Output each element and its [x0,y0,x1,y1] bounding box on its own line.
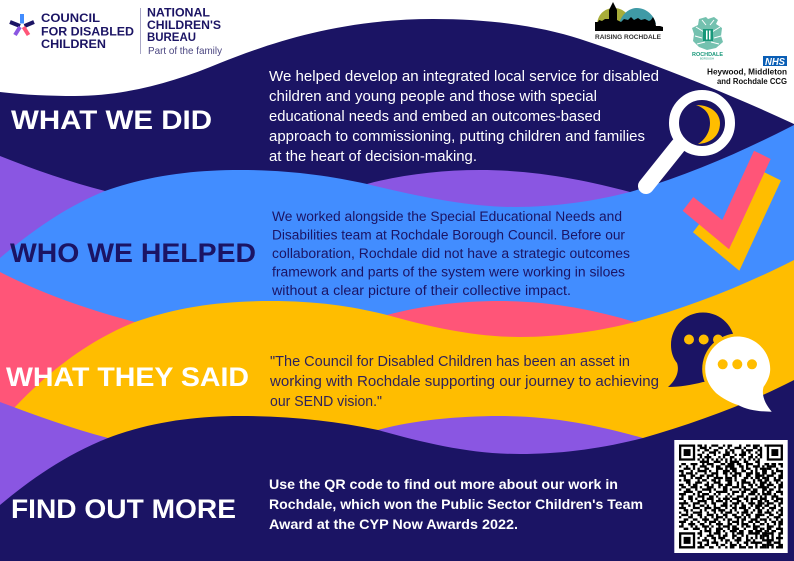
logo: Raising Rochdale: RAISING ROCHDALE [595,34,662,41]
wave: purple accent upper [0,156,630,300]
heading: what we did: WHAT WE DID [11,105,212,135]
logo: National Children's Bureau: BUREAU [147,31,196,44]
wave: yellow what they said band [0,260,794,470]
icon: magnifying glass [646,95,730,186]
text block: quote: working with Rochdale supporting our journey to achieving [269,374,659,390]
wave: navy find out more band [0,380,794,561]
text block: what we did: educational needs and embed an outcomes-based [269,109,601,125]
text block: what we did: children and young people and those with special [269,89,597,105]
logo: NHS Heywood, Middleton and Rochdale CCG: and Rochdale CCG [717,76,787,86]
heading: what they said: WHAT THEY SAID [6,362,249,392]
logo: Rochdale Borough crest: ROCHDALE [692,52,724,58]
text block: what we did: We helped develop an integrated local service for disabled [269,69,659,85]
text block: who we helped: We worked alongside the Special Educational Needs and [272,209,622,224]
text block: what we did [269,69,659,165]
wave: pink accent [0,272,635,420]
text block: what we did: approach to commissioning, putting children and families [269,129,645,145]
text block: who we helped: framework and parts of the system were working in siloes [272,264,625,280]
logo: Rochdale Borough crest: BOROUGH [700,56,714,60]
logo: NHS Heywood, Middleton and Rochdale CCG: NHS [765,56,785,68]
text block: who we helped: without a clear picture of their collective impact. [271,283,571,298]
wave: purple accent lower [0,402,643,520]
icon: white bubble [702,334,773,412]
logo: Raising Rochdale [595,2,663,41]
logo wordmark [41,11,134,51]
text block: find out more [269,476,643,532]
logo wordmark: CHILDREN [41,37,106,51]
logo: Council for Disabled Children [10,11,134,51]
icon: star mark [10,14,34,35]
text block: who we helped [271,209,630,298]
logo: National Children's Bureau: NATIONAL [147,6,210,20]
logo wordmark: FOR DISABLED [41,24,134,38]
text block: what we did: at the heart of decision-making. [269,149,477,165]
icon: navy bubble [668,312,735,387]
heading: who we helped: WHO WE HELPED [10,238,256,268]
text block: find out more: Rochdale, which won the Public Sector Children's Team [269,496,643,512]
text block: quote: our SEND vision." [270,394,382,410]
text block: find out more: Award at the CYP Now Awards 2022. [269,516,518,532]
wave: blue who we helped band [0,125,794,420]
text block: find out more: Use the QR code to find out more about our work in [269,476,618,492]
icon: speech bubbles [668,312,773,412]
icon: check mark [683,151,781,271]
text block: who we helped: Disabilities team at Rochdale Borough Council. Before our [272,228,626,242]
text block: quote: "The Council for Disabled Children has been an asset in [270,354,630,370]
text block: who we helped: collaboration, Rochdale did not have a strategic outcomes [272,246,630,261]
logo: Rochdale Borough crest [692,17,724,60]
QR code [674,440,788,553]
logo: NHS Heywood, Middleton and Rochdale CCG [707,56,787,86]
logo: National Children's Bureau [147,6,223,57]
text block: quote [269,354,659,410]
logo: National Children's Bureau: CHILDREN'S [147,19,221,32]
heading: find out more: FIND OUT MORE [11,494,236,524]
logo: National Children's Bureau: Part of the family [148,46,223,57]
logo wordmark: COUNCIL [41,11,100,25]
wave: navy what we did band [0,19,794,320]
logo: NHS Heywood, Middleton and Rochdale CCG: Heywood, Middleton [707,66,787,76]
